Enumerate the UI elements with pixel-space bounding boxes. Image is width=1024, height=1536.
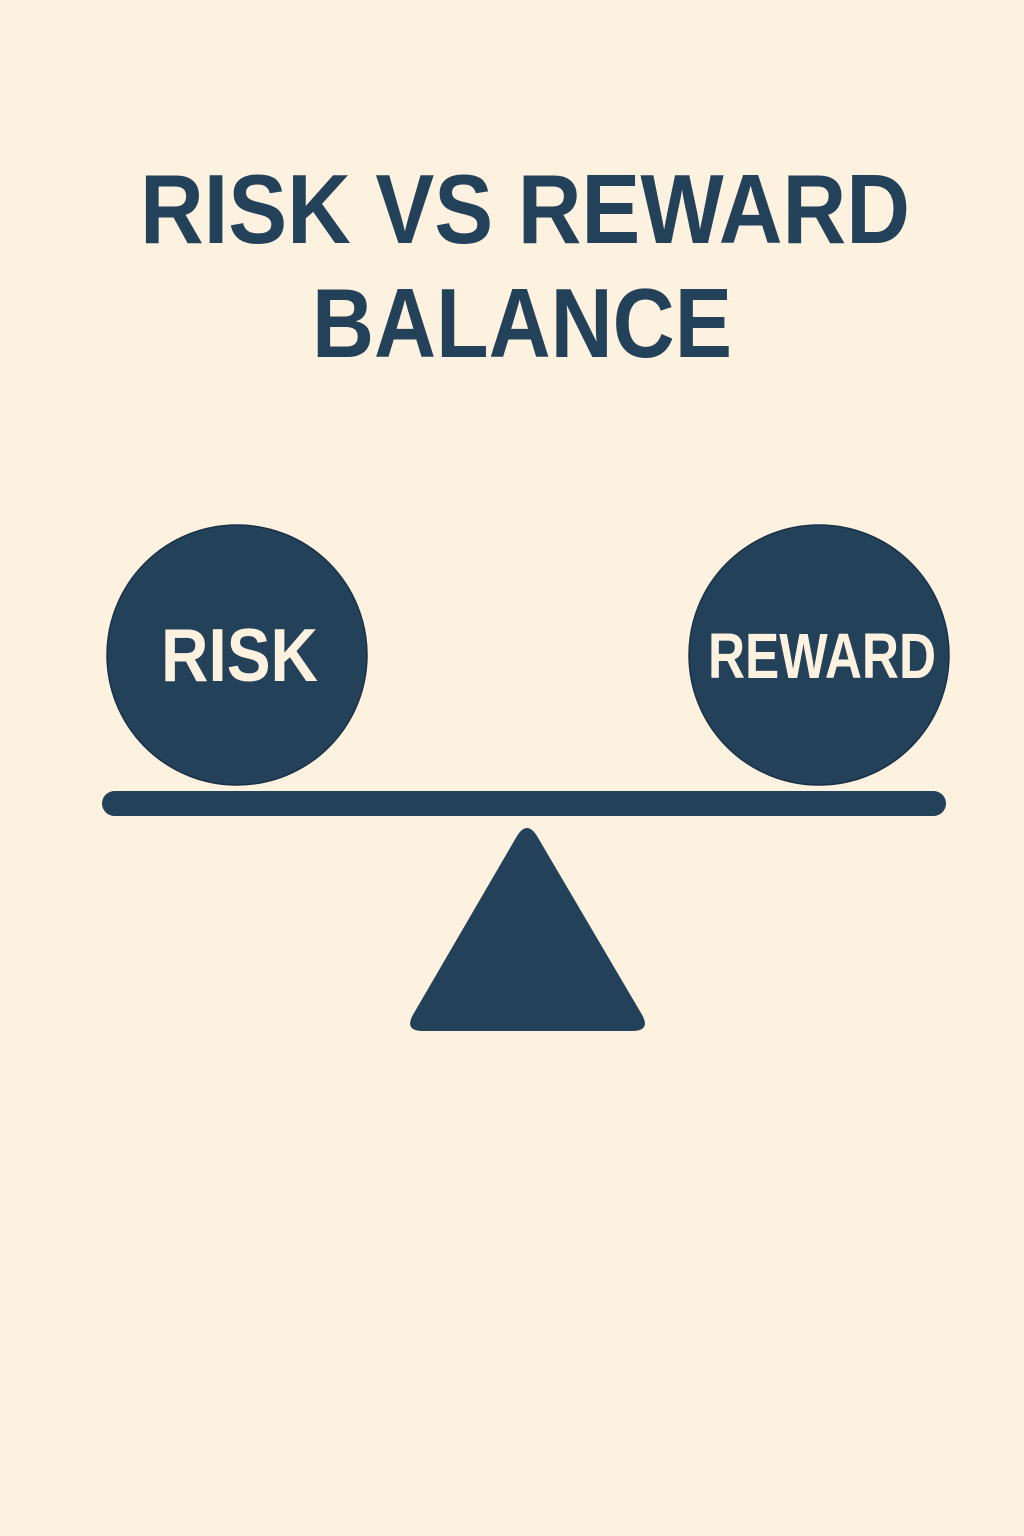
title [140,154,910,378]
fulcrum triangle [410,828,645,1031]
circle: reward: REWARD [708,620,936,692]
title: RISK VS REWARD [140,154,910,264]
circle: risk [107,525,367,785]
circle: reward [689,525,949,785]
title: BALANCE [312,268,732,378]
beam [102,791,946,816]
circle: risk: RISK [161,613,318,697]
